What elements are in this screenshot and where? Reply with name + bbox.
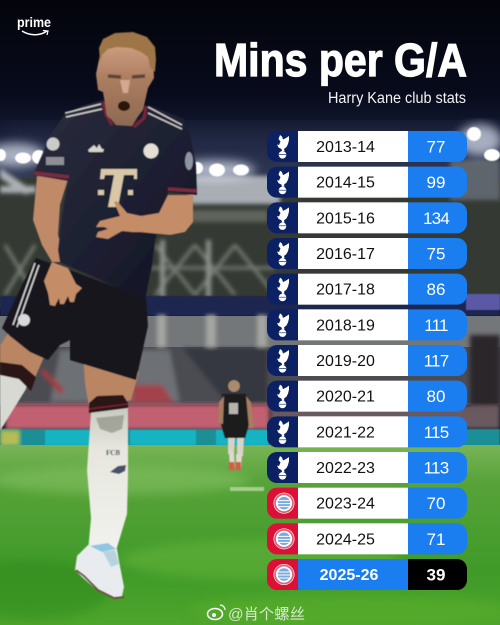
shorts — [2, 258, 148, 380]
row 2017-18 — [267, 274, 467, 305]
watermark: weibo: @肖个螺丝 — [228, 606, 305, 623]
hair — [99, 32, 156, 72]
UCL badge — [46, 138, 60, 150]
row 2015-16 — [267, 202, 467, 233]
row 2024-25: 2024-25 — [316, 531, 375, 548]
row 2016-17: 2016-17 — [316, 246, 375, 263]
row 2018-19: 111 — [424, 316, 448, 335]
row 2016-17: 75 — [427, 244, 445, 264]
row 2025-26 highlighted: 2025-26 — [320, 567, 378, 584]
title: Mins per G/A — [214, 34, 467, 86]
row 2014-15 — [267, 167, 467, 198]
shirt logo: T — [100, 169, 137, 207]
left leg — [0, 330, 48, 380]
face — [96, 42, 154, 124]
row 2020-21 — [267, 381, 467, 412]
row 2020-21: 2020-21 — [316, 389, 375, 406]
boot — [75, 543, 124, 599]
stadium floodlights — [0, 124, 500, 180]
main player: Harry Kane — [0, 32, 197, 599]
row 2023-24: 2023-24 — [316, 496, 375, 513]
shirt adidas logo — [88, 144, 104, 152]
row 2024-25: 71 — [427, 530, 445, 549]
sock logo — [106, 449, 126, 474]
row 2021-22 — [267, 416, 467, 447]
row 2018-19: 2018-19 — [316, 317, 375, 334]
table: minutes per goal involvement by season — [267, 131, 467, 590]
row 2013-14: 2013-14 — [316, 139, 375, 156]
row 2016-17 — [267, 238, 467, 269]
row 2024-25 — [267, 523, 467, 554]
hand — [44, 262, 82, 306]
row 2023-24: 70 — [427, 494, 445, 513]
row 2022-23: 2022-23 — [316, 460, 375, 477]
row 2023-24 — [267, 488, 467, 519]
row 2017-18: 2017-18 — [316, 282, 375, 299]
sock logo: FCB — [106, 449, 120, 457]
row 2022-23: 113 — [424, 458, 449, 478]
row 2021-22: 2021-22 — [316, 424, 375, 441]
row 2015-16: 134 — [423, 209, 449, 228]
right arm and hand — [96, 195, 193, 239]
row 2017-18: 86 — [427, 280, 445, 299]
row 2014-15: 2014-15 — [316, 175, 375, 192]
neck — [106, 96, 144, 126]
sock: right — [87, 404, 128, 554]
shirt — [33, 100, 197, 300]
right leg — [83, 352, 139, 412]
row 2013-14: 77 — [427, 138, 445, 156]
shirt crest — [144, 144, 158, 158]
row 2021-22: 115 — [424, 423, 449, 442]
logo: prime: prime — [17, 14, 51, 30]
sock: left — [0, 375, 28, 431]
left arm — [33, 176, 68, 262]
row 2022-23 — [267, 452, 467, 483]
row 2019-20 — [267, 345, 467, 376]
subtitle: Harry Kane club stats — [328, 90, 466, 107]
background player — [218, 380, 254, 470]
row 2014-15: 99 — [427, 173, 445, 192]
row 2025-26 highlighted: 39 — [427, 566, 445, 584]
row 2020-21: 80 — [427, 387, 445, 406]
row 2018-19 — [267, 309, 467, 340]
row 2019-20: 117 — [424, 352, 449, 370]
row 2015-16: 2015-16 — [316, 210, 375, 227]
row 2013-14 — [267, 131, 467, 162]
row 2025-26 highlighted — [267, 559, 467, 590]
row 2019-20: 2019-20 — [316, 353, 375, 370]
